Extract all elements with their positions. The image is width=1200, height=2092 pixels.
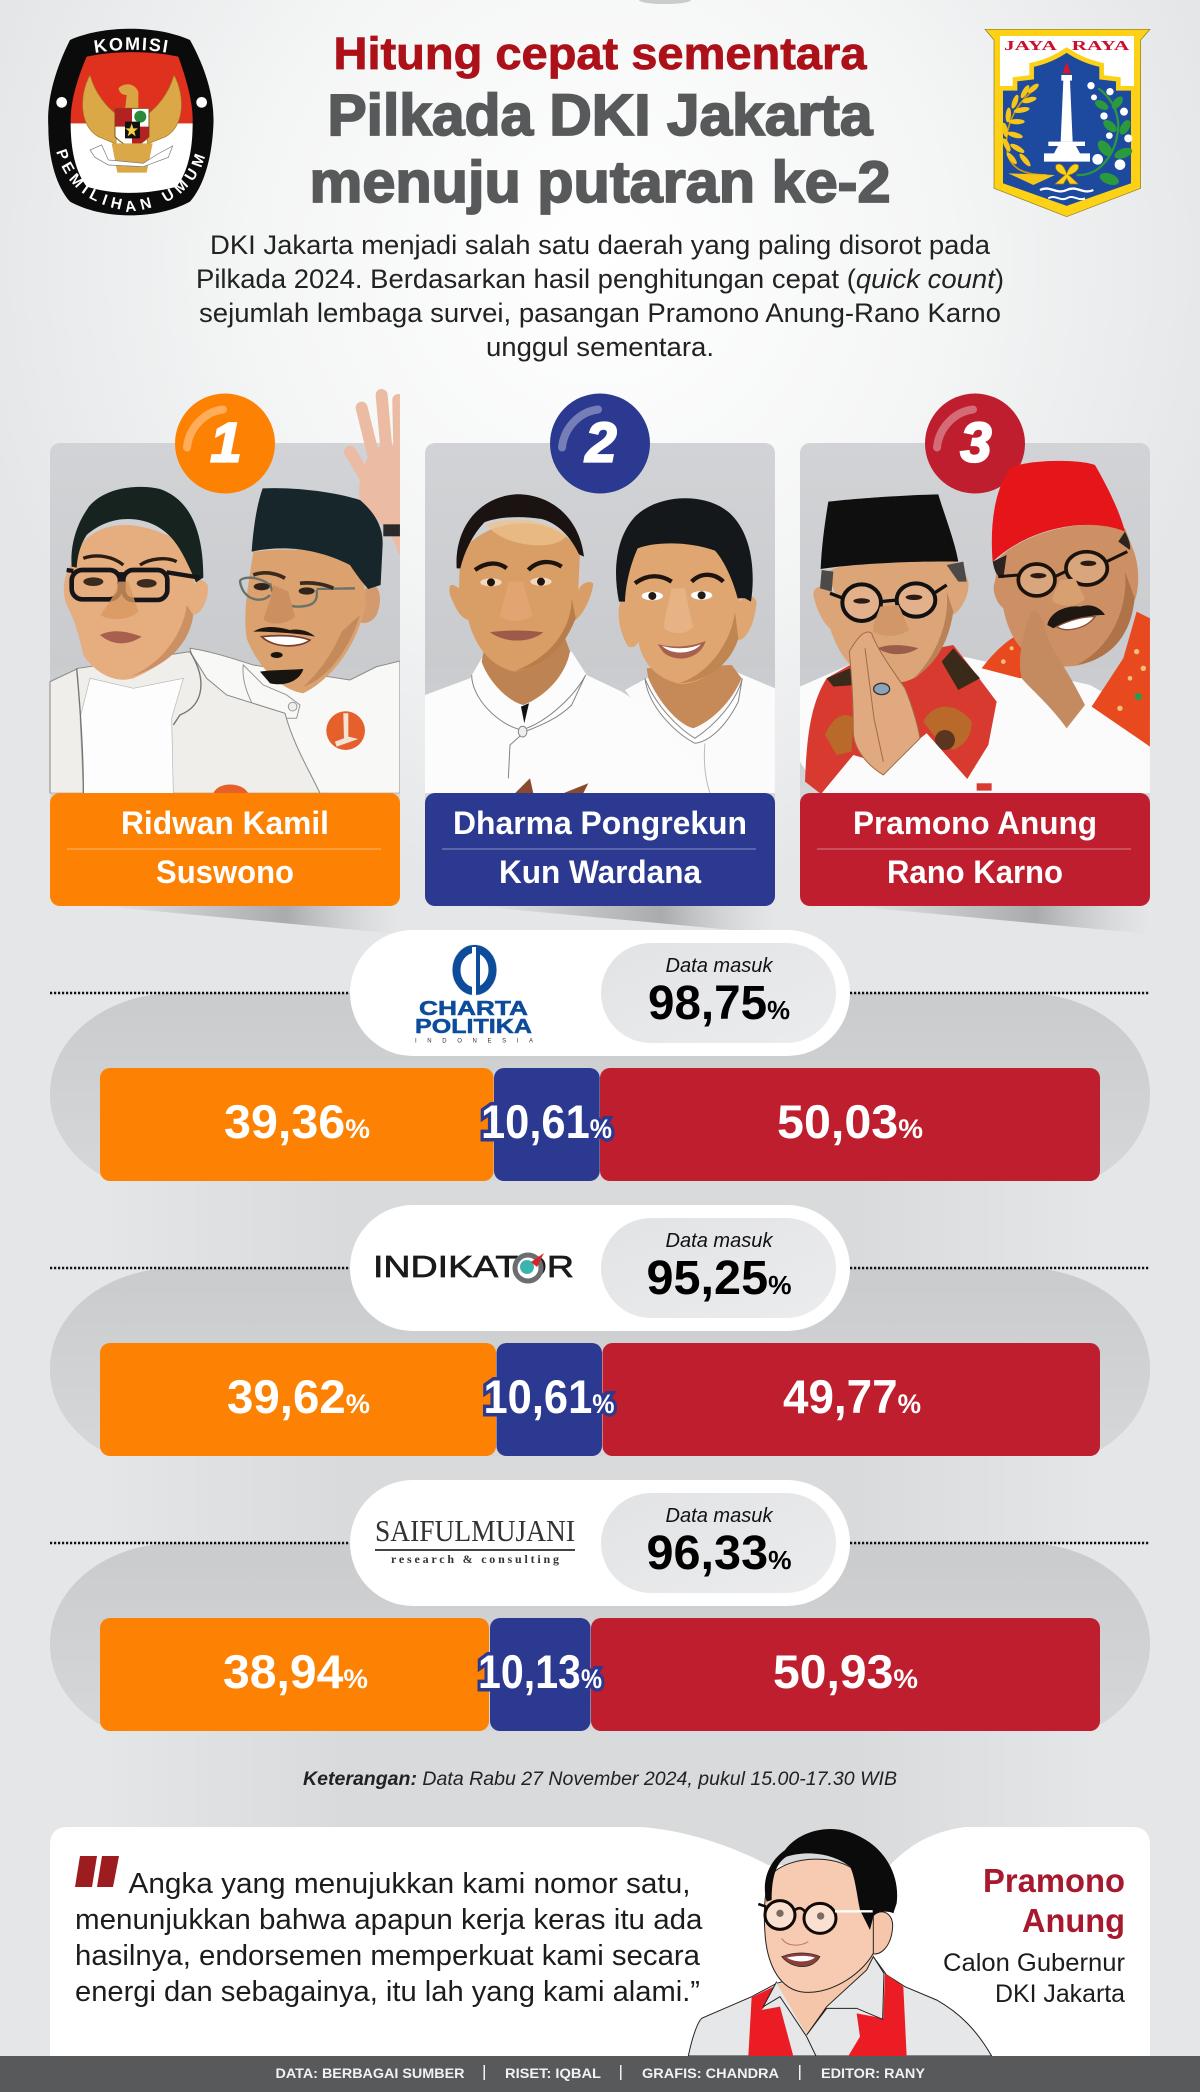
card background [425,443,775,843]
illustration: Pramono Anung [688,1829,992,2056]
stacked bar: Saiful Mujani: 50,93% [773,1645,918,1698]
intro text block: unggul sementara. [486,332,714,362]
stacked bar: Indikator [100,1343,1100,1456]
speaker name and role: Pramono [983,1862,1125,1899]
name label: Pramono Anung / Rano Karno [800,793,1150,906]
intro text block [196,230,1004,362]
logo: KPU Komisi Pemilihan Umum: PEMILIHAN UMUM [56,148,205,212]
logo: Jaya Raya crest: JAYA RAYA [1004,38,1130,53]
pill: survey logo and data masuk [350,1480,850,1606]
quote text: menunjukkan bahwa apapun kerja keras itu ada [75,1904,703,1936]
panel: survey Indikator [50,1205,1150,1543]
stacked bar: Saiful Mujani: 10,13% [478,1645,602,1698]
footer credits: EDITOR: RANY [821,2066,925,2081]
logo: Saiful Mujani: research & consulting [391,1552,559,1566]
speaker name and role: DKI Jakarta [995,1980,1125,2008]
data masuk: Data masuk [666,1505,773,1527]
stacked bar: Charta Politika: 50,03% [777,1095,923,1148]
number badge 3 [925,394,1025,494]
panel: candidate 3 Pramono Anung - Rano Karno [800,394,1150,934]
name label: Ridwan Kamil / Suswono [50,793,400,906]
stacked bar: Saiful Mujani: 38,94% [223,1645,368,1698]
name label: Dharma Pongrekun / Kun Wardana: Kun Wardana [499,854,701,890]
footer credits: GRAFIS: CHANDRA [642,2066,779,2081]
shadow under label [100,906,400,934]
panel: quote [50,1827,1150,2056]
intro text block: sejumlah lembaga survei, pasangan Pramono Anung-Rano Karno [199,298,1001,328]
stacked bar: Indikator: 39,62% [227,1370,370,1423]
portrait: Pramono Anung and Rano Karno [800,461,1150,793]
stacked bar: Indikator: 49,77% [783,1370,921,1423]
pill: survey logo and data masuk [350,930,850,1056]
intro text block: Pilkada 2024. Berdasarkan hasil penghitungan cepat ( quick count) [196,264,1004,294]
stacked bar: Saiful Mujani [100,1618,1100,1731]
speaker name and role [943,1862,1125,2008]
name label: Dharma Pongrekun / Kun Wardana: Dharma Pongrekun [453,805,747,841]
logo: Jaya Raya crest [985,29,1150,217]
speaker name and role: Calon Gubernur [943,1949,1125,1977]
logo: Charta Politika [415,946,533,1044]
footnote: keterangan: Keterangan: Data Rabu 27 November 2024, pukul 15.00-17.30 WIB [303,1768,897,1790]
card background [800,443,1150,843]
title [310,28,890,215]
pill: survey logo and data masuk: 95,25% [646,1252,792,1305]
name label: Ridwan Kamil / Suswono: Suswono [156,854,294,890]
logo: KPU Komisi Pemilihan Umum: KOMISI [94,37,168,53]
stacked bar: Charta Politika [100,1068,1100,1181]
footer credits: DATA: BERBAGAI SUMBER [276,2066,465,2081]
icon: quotation mark [75,1856,119,1887]
number badge 2: 2 [584,410,617,474]
name label: Pramono Anung / Rano Karno: Pramono Anung [853,805,1097,841]
footer credits [0,2056,1200,2092]
number badge 2 [550,394,650,494]
stacked bar: Charta Politika: 39,36% [224,1095,370,1148]
logo: Charta Politika: INDONESIA [415,1038,533,1044]
data masuk: Data masuk [666,955,773,977]
logo: Charta Politika: CHARTA [419,998,528,1020]
panel: candidate 2 Dharma Pongrekun - Kun Wardana [425,394,775,934]
quote text [75,1868,703,2008]
portrait: Dharma Pongrekun and Kun Wardana [425,494,775,793]
pill: survey logo and data masuk: 96,33% [646,1527,792,1580]
pill: survey logo and data masuk: 98,75% [648,977,790,1030]
card background [50,443,400,843]
intro text block: DKI Jakarta menjadi salah satu daerah yang paling disorot pada [210,230,990,260]
name label: Pramono Anung / Rano Karno: Rano Karno [887,854,1063,890]
heading: red kicker: Hitung cepat sementara [334,28,868,79]
heading: second line: menuju putaran ke-2 [310,150,890,215]
heading: first line: Pilkada DKI Jakarta [328,83,873,148]
quote text: Angka yang menujukkan kami nomor satu, [128,1868,690,1900]
portrait: Ridwan Kamil and Suswono [50,395,407,793]
stacked bar: Indikator: 10,61% [484,1370,614,1423]
name label: Ridwan Kamil / Suswono: Ridwan Kamil [121,805,329,841]
speaker name and role: Anung [1022,1902,1125,1939]
data masuk: Data masuk [666,1230,773,1252]
logo: Charta Politika: POLITIKA [415,1016,532,1038]
logo: Saiful Mujani: SAIFULMUJANI [375,1513,575,1548]
stacked bar: Charta Politika: 10,61% [481,1095,612,1148]
logo: KPU Komisi Pemilihan Umum [48,28,214,216]
logo: Saiful Mujani [375,1513,575,1566]
panel: survey Charta Politika [50,930,1150,1268]
quote text: energi dan sebagainya, itu lah yang kami alami.” [75,1976,700,2008]
logo: Indikator: INDIKATOR [373,1249,574,1284]
panel: candidate 1 Ridwan Kamil - Suswono [50,394,407,934]
number badge 1 [175,394,275,494]
shadow under label [475,906,775,934]
panel: survey Saiful Mujani [50,1480,1150,1881]
footer credits: RISET: IQBAL [505,2066,601,2081]
number badge 3: 3 [960,410,992,474]
quote text: hasilnya, endorsemen memperkuat kami secara [75,1940,701,1972]
number badge 1: 1 [210,410,242,474]
shadow under label [850,906,1150,934]
name label: Dharma Pongrekun / Kun Wardana [425,793,775,906]
pill: survey logo and data masuk [350,1205,850,1331]
